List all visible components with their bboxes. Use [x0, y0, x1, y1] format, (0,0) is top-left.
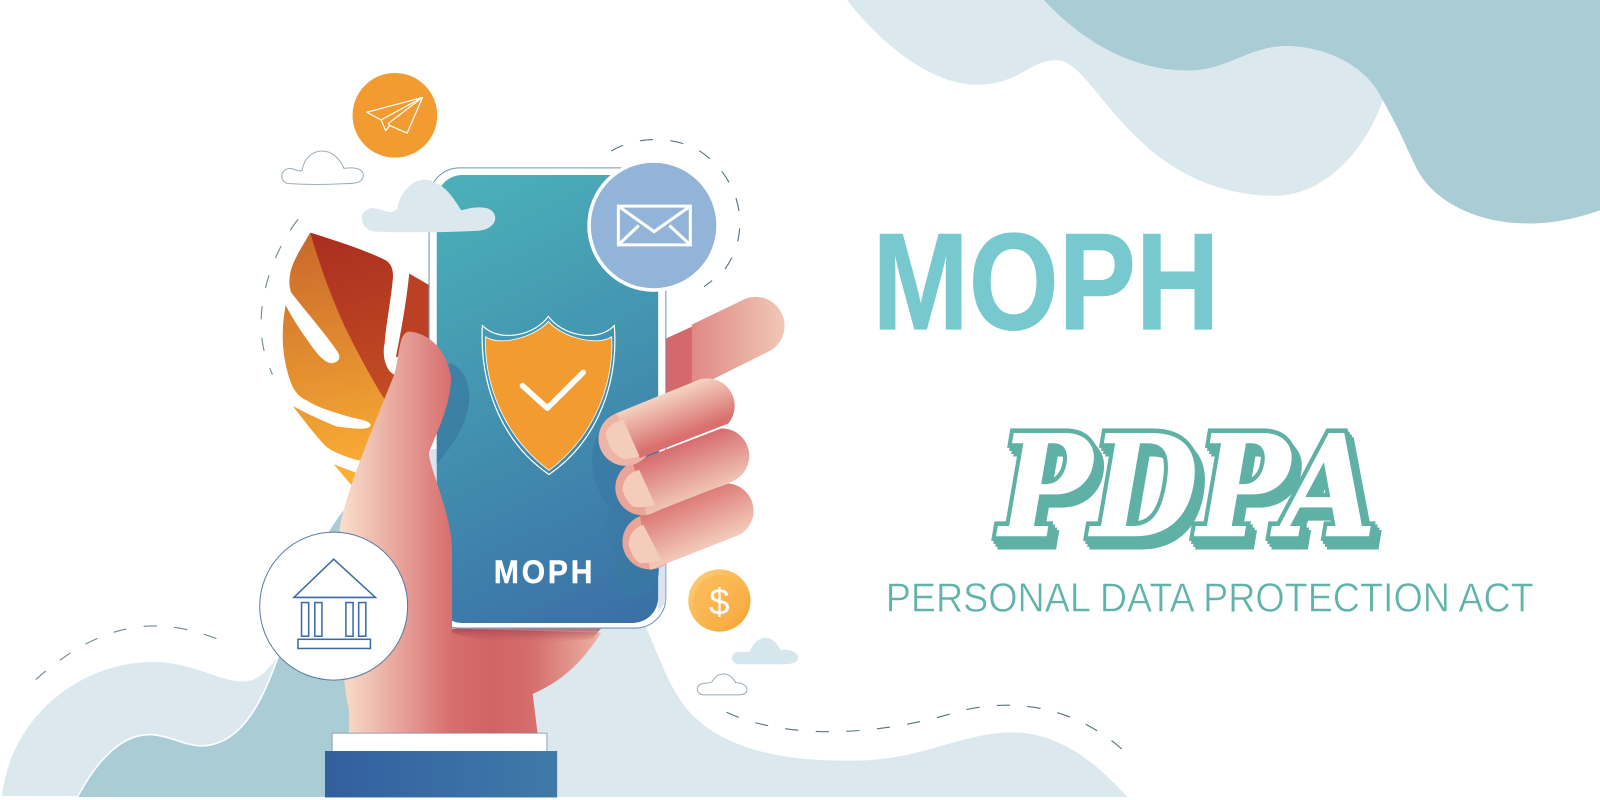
title: PDPA: PDPA — [996, 405, 1376, 568]
jacket sleeve — [325, 751, 557, 797]
outline cloud: top left — [282, 151, 363, 184]
icon: bank — [294, 559, 376, 648]
dashed arc around mail — [611, 140, 740, 287]
small filled cloud — [732, 638, 798, 664]
bank badge — [260, 532, 408, 680]
fingers — [598, 378, 754, 570]
title: PDPA: PDPA — [1003, 414, 1382, 577]
frame shading — [429, 449, 665, 612]
phone frame — [429, 168, 666, 628]
background blob: top right dark — [1044, 0, 1600, 223]
index finger — [653, 297, 785, 390]
small outline cloud — [697, 674, 747, 695]
dashed arc around leaf — [261, 219, 298, 374]
leaf — [283, 233, 429, 490]
dashed path: bottom left — [36, 626, 219, 680]
title: PDPA: PDPA — [999, 408, 1378, 571]
coin: $ — [709, 581, 730, 622]
phone label: MOPH — [494, 554, 595, 590]
icon: envelope — [618, 206, 690, 245]
subtitle: PERSONAL DATA PROTECTION ACT — [886, 575, 1534, 621]
phone shadow on palm — [452, 629, 601, 642]
shirt cuff — [332, 733, 547, 753]
phone — [429, 168, 666, 628]
phone screen — [437, 175, 658, 623]
leaf lower lobe — [334, 464, 363, 490]
shield — [482, 316, 615, 474]
background blob: bottom right light — [510, 612, 1128, 797]
light cloud over phone — [362, 180, 495, 232]
leaf red back lobe — [396, 273, 429, 357]
background blob: top right light — [847, 0, 1383, 196]
title: PDPA: PDPA — [1001, 411, 1380, 574]
background blob: bottom left dark — [78, 500, 541, 797]
title: PDPA: PDPA — [996, 405, 1376, 568]
title: MOPH: MOPH — [872, 205, 1219, 359]
icon: paper plane badge — [353, 73, 437, 158]
finger two — [598, 378, 735, 466]
check mark — [522, 372, 583, 408]
leaf orange body — [283, 233, 408, 461]
dashed path: bottom right — [727, 705, 1131, 757]
hand and thumb — [340, 332, 601, 735]
finger three — [615, 428, 749, 515]
mail badge — [587, 159, 720, 292]
finger four — [622, 483, 754, 570]
background blob: bottom left light — [1, 655, 279, 797]
coin — [688, 569, 751, 632]
finger shadows on screen — [437, 363, 659, 597]
leaf red section — [310, 233, 400, 403]
